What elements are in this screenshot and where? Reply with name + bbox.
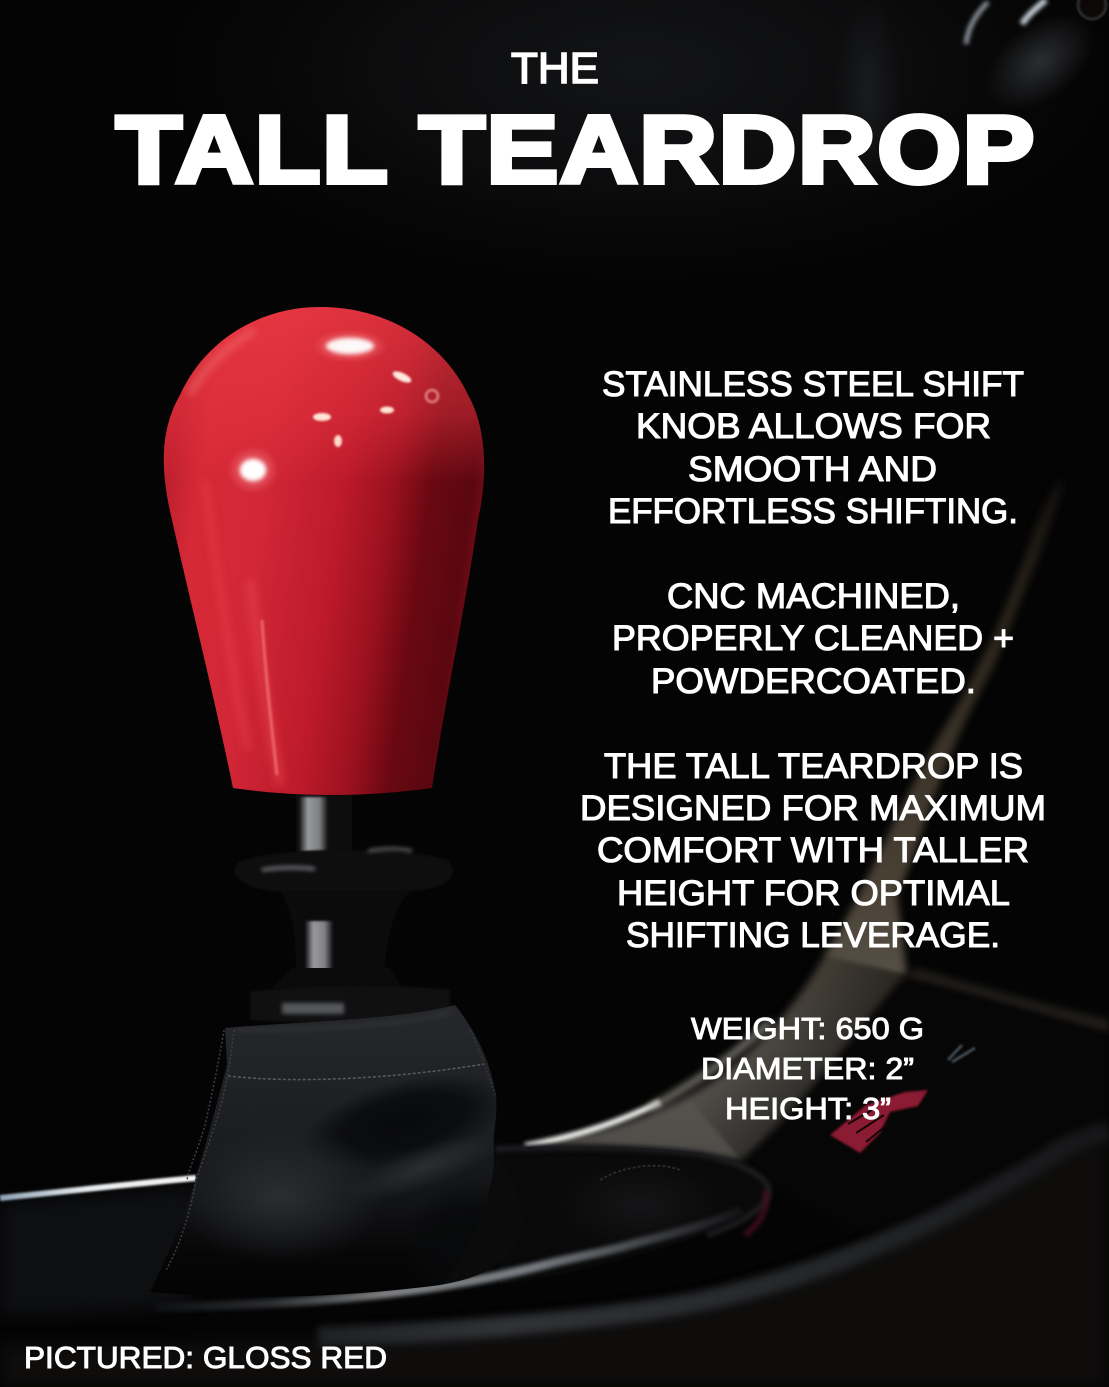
heading: tall teardrop: TALL TEARDROP: [116, 96, 1034, 203]
text block: specifications: [691, 1011, 924, 1126]
title: [116, 44, 1034, 203]
boot right lobe: [430, 1145, 522, 1285]
bright console line: [155, 1210, 742, 1307]
steering spoke sweeping arc: [525, 480, 1109, 1165]
text block: design: SHIFTING LEVERAGE.: [626, 916, 1000, 955]
text block: machining: PROPERLY CLEANED +: [612, 619, 1014, 658]
shift knob assembly: [150, 307, 499, 1296]
text block: material: KNOB ALLOWS FOR: [636, 407, 991, 446]
shaft with collar: [235, 792, 453, 1022]
caption: pictured finish: PICTURED: GLOSS RED: [24, 1340, 387, 1375]
text block: machining: CNC MACHINED,: [667, 577, 960, 616]
left highlight on console rim: [0, 1178, 196, 1198]
text block: material: EFFORTLESS SHIFTING.: [608, 492, 1018, 531]
text block: material: SMOOTH AND: [688, 450, 937, 489]
text block: design: COMFORT WITH TALLER: [597, 831, 1029, 870]
text block: specifications: DIAMETER: 2”: [701, 1051, 914, 1086]
text block: material: STAINLESS STEEL SHIFT: [602, 365, 1024, 404]
text block: specifications: HEIGHT: 3”: [725, 1091, 891, 1126]
text block: machining: POWDERCOATED.: [651, 662, 976, 701]
text block: material: [602, 365, 1024, 531]
red teardrop knob: [164, 307, 484, 795]
console surfaces and light lines: [0, 1130, 1109, 1337]
text block: design: DESIGNED FOR MAXIMUM: [580, 789, 1046, 828]
heading: the: THE: [511, 44, 599, 93]
text block: design: HEIGHT FOR OPTIMAL: [617, 874, 1010, 913]
text block: specifications: WEIGHT: 650 G: [691, 1011, 924, 1046]
text block: machining: [612, 577, 1014, 701]
top right control knob: [966, 0, 1109, 130]
lower sweep: [318, 1130, 1109, 1337]
gloss highlights: [312, 329, 388, 363]
carbon panel with badge: [745, 978, 1109, 1235]
lit region under lower sweep: [0, 1130, 1109, 1387]
text block: design: THE TALL TEARDROP IS: [604, 747, 1023, 786]
leather boot: [150, 1005, 496, 1296]
shifter bezel ring: [495, 1146, 769, 1285]
text block: design: [580, 747, 1046, 955]
